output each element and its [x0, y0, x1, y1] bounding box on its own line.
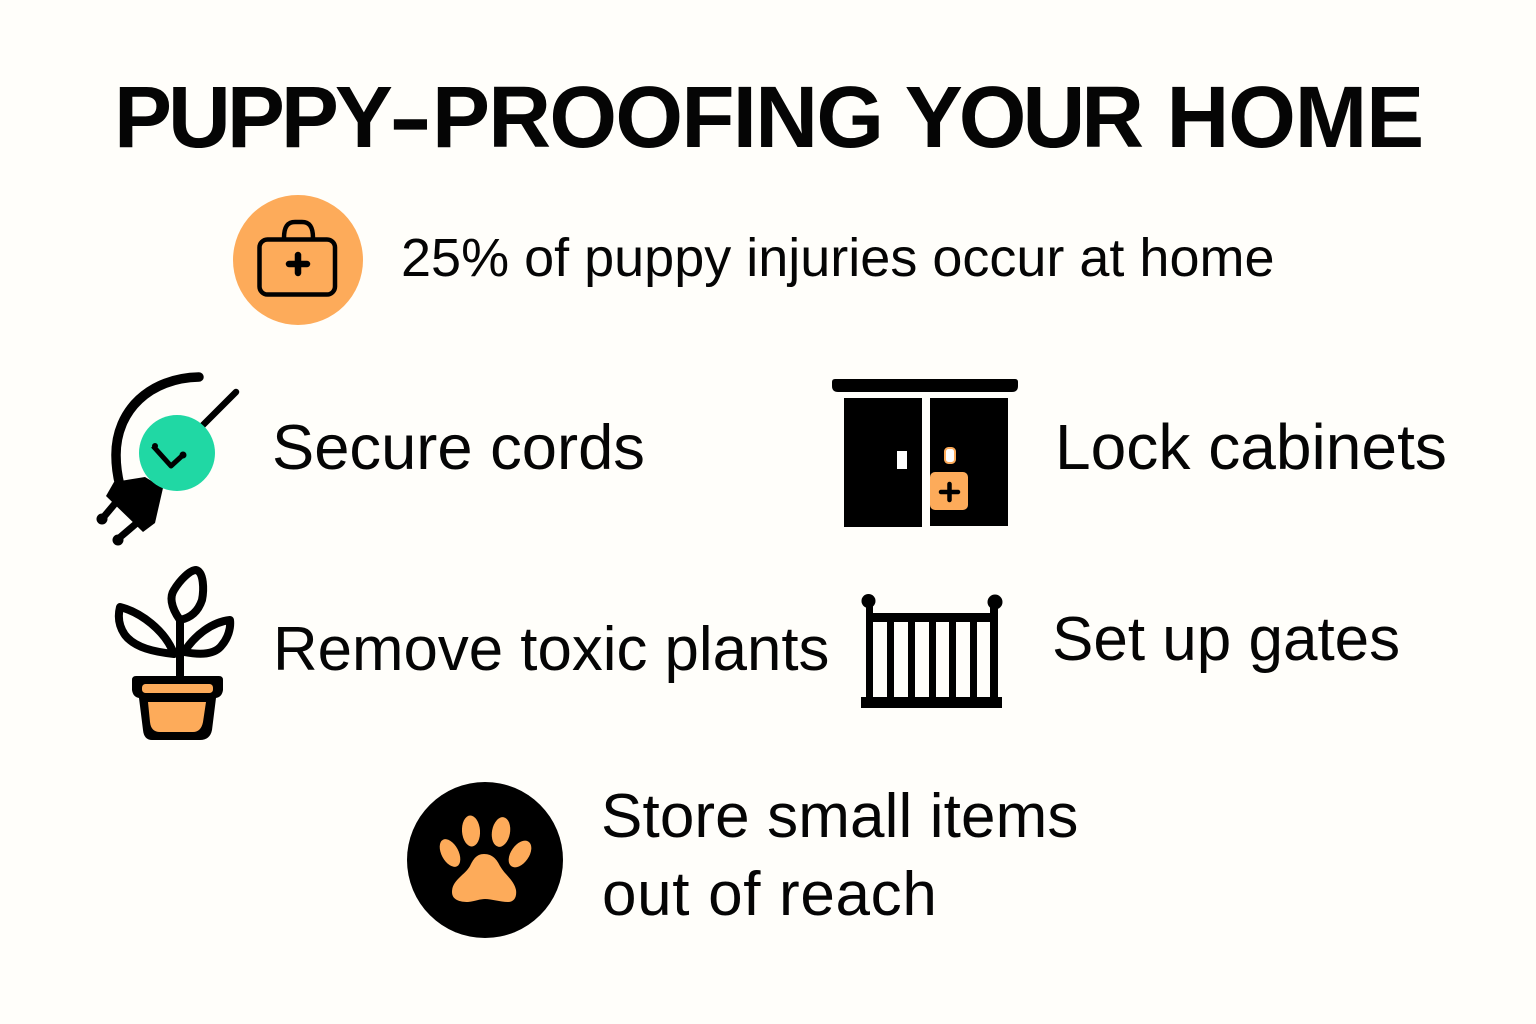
stat text: 25% of puppy injuries occur at home [401, 228, 1274, 288]
text: store small items [601, 782, 1078, 929]
icon: baby gate [861, 594, 1002, 708]
icon: first aid kit [233, 195, 363, 325]
text: lock cabinets: Lock cabinets [1055, 411, 1447, 483]
text: remove toxic plants: Remove toxic plants [273, 615, 829, 684]
title: - [389, 69, 432, 166]
icon: plug with check [96, 377, 236, 546]
text: store small items: Store small items [601, 782, 1078, 851]
text: set up gates: Set up gates [1052, 605, 1400, 674]
text: secure cords: Secure cords [272, 413, 645, 483]
icon: cabinet with lock [832, 379, 1018, 527]
text: store small items: out of reach [602, 860, 937, 929]
icon: paw [407, 782, 563, 938]
icon: potted plant [119, 570, 230, 740]
title: PUPPY PROOFING YOUR HOME [114, 69, 1423, 166]
